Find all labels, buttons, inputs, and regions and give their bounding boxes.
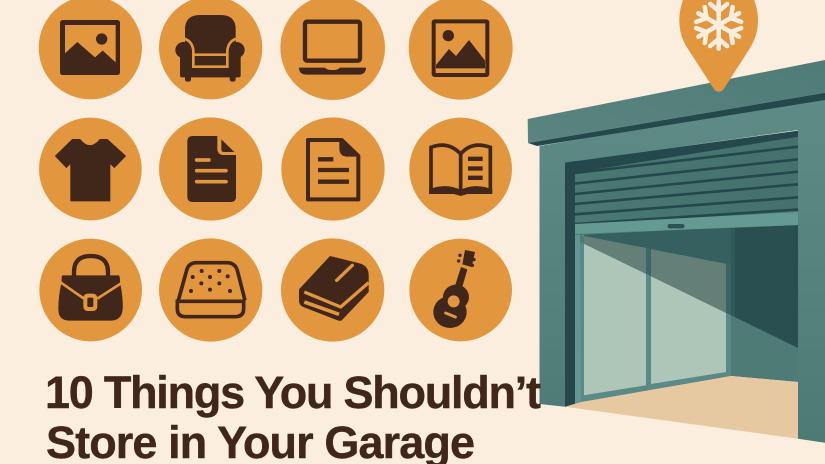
location pin with snowflake [679,0,758,92]
title line 1: 10 Things You Shouldn’t [45,367,541,418]
icon: laptop [280,0,385,100]
left inner jamb [565,161,575,407]
door handle [668,224,684,228]
icon: armchair [159,0,262,99]
icon: closed book [281,238,384,342]
garage wall and pillars [540,98,825,443]
icon: sponge cushion [159,238,262,342]
icon: framed picture [409,0,513,100]
glass panels [584,244,726,395]
icon: outline document [281,117,385,221]
pin [679,0,758,92]
interior shadowed right wall [731,225,798,348]
roof shadow strip [528,93,825,146]
interior back wall [575,225,798,406]
garage roof [528,60,825,143]
rolled door slats [565,131,798,236]
icon: handbag [39,239,142,341]
interior shadowed header [580,227,731,300]
icon: open book [409,118,512,220]
icon: t-shirt [39,118,142,220]
garage illustration [528,60,825,443]
icon: guitar [409,239,512,341]
garage floor [565,376,798,439]
icon: picture [39,0,142,99]
interior corner post [731,228,735,317]
shadow on glass [580,235,731,315]
window frame [575,235,731,406]
door bottom rail [575,212,798,234]
icon: filled document [159,117,262,221]
snowflake [694,2,743,48]
title [45,367,541,464]
